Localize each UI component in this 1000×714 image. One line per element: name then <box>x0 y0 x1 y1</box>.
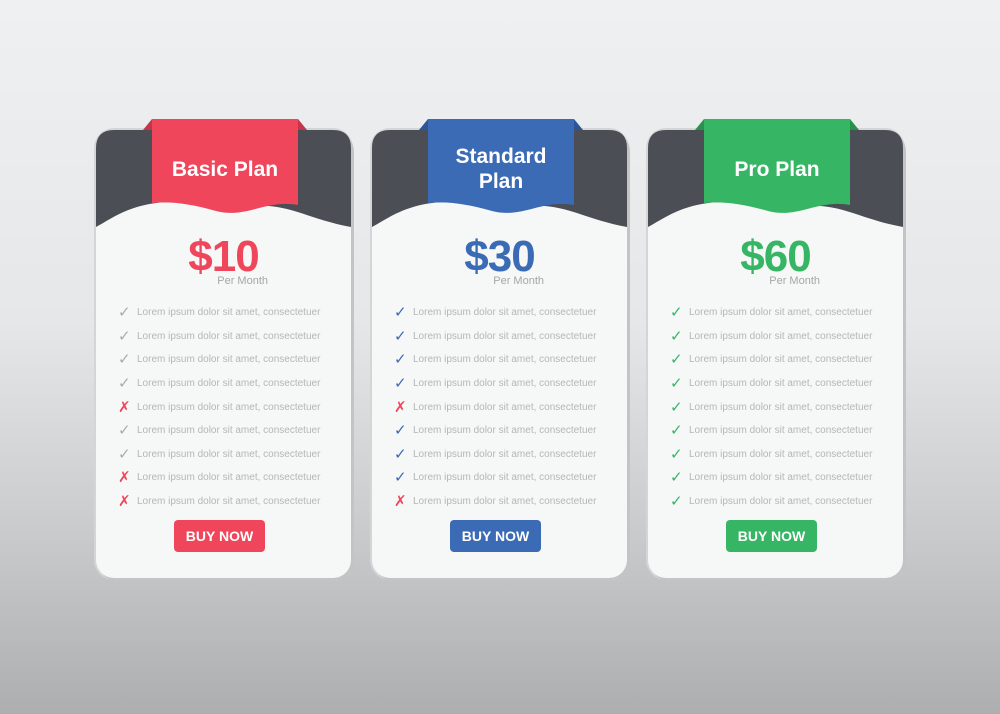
price: $60 <box>740 232 811 281</box>
heading: Plan <box>479 170 523 193</box>
feature list: ✓ <box>670 399 683 416</box>
feature list: ✓ <box>118 304 131 321</box>
feature list: ✓ <box>670 328 683 345</box>
feature list <box>118 304 320 510</box>
feature list: Lorem ipsum dolor sit amet, consectetuer <box>689 496 872 507</box>
feature list: Lorem ipsum dolor sit amet, consectetuer <box>689 402 872 413</box>
feature list: ✗ <box>118 399 131 416</box>
feature list: ✓ <box>670 493 683 510</box>
feature list: Lorem ipsum dolor sit amet, consectetuer <box>413 402 596 413</box>
feature list: ✓ <box>394 304 407 321</box>
feature list: ✓ <box>394 469 407 486</box>
feature list: ✓ <box>118 351 131 368</box>
feature list: Lorem ipsum dolor sit amet, consectetuer <box>413 425 596 436</box>
feature list <box>670 304 872 510</box>
feature list: Lorem ipsum dolor sit amet, consectetuer <box>689 331 872 342</box>
header graphic <box>648 119 903 227</box>
button: BUY NOW <box>186 528 253 544</box>
feature list: Lorem ipsum dolor sit amet, consectetuer <box>413 331 596 342</box>
panel: pro plan: Per Month <box>769 275 820 287</box>
feature list: ✓ <box>670 351 683 368</box>
button: BUY NOW <box>738 528 805 544</box>
button <box>174 520 265 552</box>
feature list: ✗ <box>118 469 131 486</box>
feature list: Lorem ipsum dolor sit amet, consectetuer <box>137 378 320 389</box>
feature list: ✓ <box>670 375 683 392</box>
feature list: ✓ <box>394 351 407 368</box>
feature list: ✓ <box>670 304 683 321</box>
feature list: Lorem ipsum dolor sit amet, consectetuer <box>413 354 596 365</box>
feature list: Lorem ipsum dolor sit amet, consectetuer <box>413 378 596 389</box>
feature list: ✓ <box>394 446 407 463</box>
feature list: Lorem ipsum dolor sit amet, consectetuer <box>413 449 596 460</box>
feature list: ✗ <box>118 493 131 510</box>
button: BUY NOW <box>462 528 529 544</box>
feature list: Lorem ipsum dolor sit amet, consectetuer <box>689 472 872 483</box>
header graphic <box>96 119 351 227</box>
feature list: ✓ <box>118 446 131 463</box>
feature list: Lorem ipsum dolor sit amet, consectetuer <box>137 425 320 436</box>
heading: Basic Plan <box>172 158 278 181</box>
feature list: Lorem ipsum dolor sit amet, consectetuer <box>413 496 596 507</box>
feature list: Lorem ipsum dolor sit amet, consectetuer <box>137 402 320 413</box>
feature list: Lorem ipsum dolor sit amet, consectetuer <box>689 449 872 460</box>
feature list: ✓ <box>118 422 131 439</box>
heading: Pro Plan <box>734 158 820 181</box>
feature list: Lorem ipsum dolor sit amet, consectetuer <box>137 449 320 460</box>
header graphic <box>372 119 627 227</box>
feature list: ✓ <box>118 375 131 392</box>
feature list: Lorem ipsum dolor sit amet, consectetuer <box>413 307 596 318</box>
price: $30 <box>464 232 535 281</box>
feature list: ✓ <box>394 328 407 345</box>
feature list <box>394 304 596 510</box>
panel: standard plan <box>370 119 630 580</box>
feature list: ✓ <box>670 469 683 486</box>
heading: Standard <box>455 145 546 168</box>
feature list: ✓ <box>394 422 407 439</box>
feature list: Lorem ipsum dolor sit amet, consectetuer <box>413 472 596 483</box>
feature list: Lorem ipsum dolor sit amet, consectetuer <box>137 496 320 507</box>
feature list: Lorem ipsum dolor sit amet, consectetuer <box>137 331 320 342</box>
feature list: ✗ <box>394 493 407 510</box>
feature list: ✓ <box>670 422 683 439</box>
button <box>450 520 541 552</box>
feature list: Lorem ipsum dolor sit amet, consectetuer <box>689 354 872 365</box>
panel: basic plan: Per Month <box>217 275 268 287</box>
heading <box>455 145 546 193</box>
feature list: ✓ <box>394 375 407 392</box>
feature list: Lorem ipsum dolor sit amet, consectetuer <box>137 307 320 318</box>
feature list: Lorem ipsum dolor sit amet, consectetuer <box>689 307 872 318</box>
panel: basic plan <box>94 119 354 580</box>
panel: pro plan <box>646 119 906 580</box>
price: $10 <box>188 232 259 281</box>
feature list: Lorem ipsum dolor sit amet, consectetuer <box>689 425 872 436</box>
feature list: ✗ <box>394 399 407 416</box>
feature list: ✓ <box>670 446 683 463</box>
button <box>726 520 817 552</box>
feature list: Lorem ipsum dolor sit amet, consectetuer <box>137 472 320 483</box>
feature list: Lorem ipsum dolor sit amet, consectetuer <box>689 378 872 389</box>
feature list: Lorem ipsum dolor sit amet, consectetuer <box>137 354 320 365</box>
panel: standard plan: Per Month <box>493 275 544 287</box>
feature list: ✓ <box>118 328 131 345</box>
